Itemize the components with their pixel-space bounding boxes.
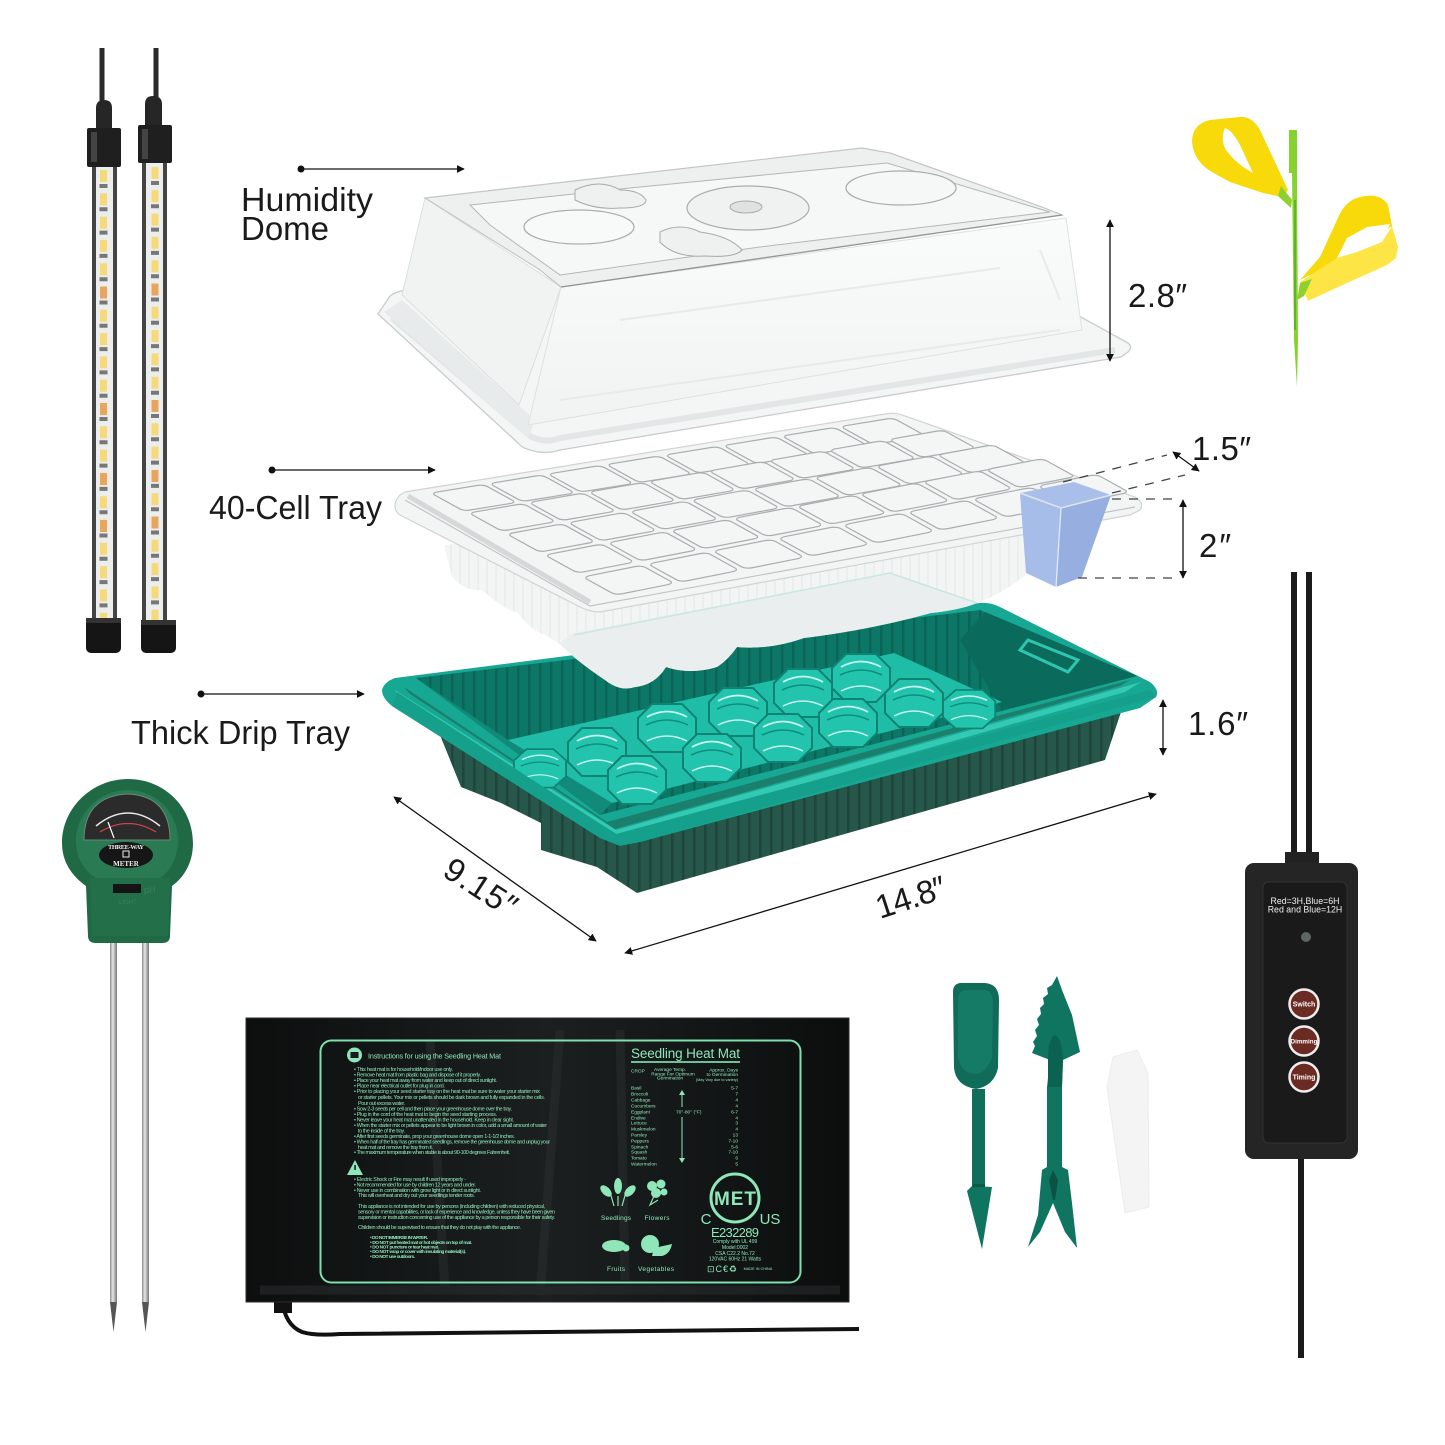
label: Humidity Dome: Humidity bbox=[241, 181, 374, 218]
warning list: • Electric Shock or Fire may result if used improperly - bbox=[354, 1177, 466, 1183]
yellow clip plant label bbox=[1192, 117, 1398, 387]
controller text: Red and Blue=12H bbox=[1268, 904, 1342, 914]
drip tray rim bbox=[382, 603, 1157, 843]
instruction list: Pour out excess water. bbox=[358, 1101, 405, 1107]
humidity dome bbox=[378, 148, 1130, 452]
crop table: 4 bbox=[735, 1098, 738, 1104]
crop table: Tomato bbox=[631, 1156, 647, 1162]
label: Humidity Dome: Dome bbox=[241, 210, 329, 247]
crop table: 5-6 bbox=[731, 1144, 738, 1150]
controller text bbox=[1268, 896, 1342, 914]
heat mat bbox=[246, 1018, 859, 1335]
dome flange bbox=[378, 290, 1130, 452]
dimension: cell width 1.5 inches: 1.5″ bbox=[1192, 430, 1251, 467]
MET certification: MET bbox=[714, 1189, 756, 1210]
icon: vegetables: Vegetables bbox=[638, 1266, 675, 1273]
icon: vegetables bbox=[638, 1235, 675, 1273]
icon: fruits: Fruits bbox=[607, 1266, 626, 1273]
left yellow loop bbox=[1192, 117, 1288, 197]
crop table: Squash bbox=[631, 1150, 648, 1156]
crop table: to Germination bbox=[707, 1072, 738, 1078]
warning list: Children should be supervised to ensure that they do not play with the appliance. bbox=[358, 1225, 521, 1231]
garden tools bbox=[953, 976, 1149, 1249]
controller body bbox=[1245, 863, 1358, 1159]
right yellow loop bbox=[1297, 196, 1398, 301]
button: timing bbox=[1290, 1062, 1318, 1092]
label: Thick Drip Tray bbox=[131, 690, 364, 751]
soil meter: LIGHT bbox=[119, 900, 137, 906]
button: dimming: Dimming bbox=[1291, 1038, 1318, 1046]
label: 40-Cell Tray bbox=[209, 466, 435, 526]
button: switch bbox=[1290, 990, 1318, 1018]
warning list: • DO NOT puncture or tear heat mat. bbox=[370, 1244, 439, 1250]
tray cells grid bbox=[431, 418, 1129, 595]
meter name plate: THREE-WAY bbox=[108, 844, 144, 851]
crop table: Average Temp. bbox=[654, 1067, 686, 1073]
trowel and fork tool bbox=[1028, 976, 1080, 1248]
warning list bbox=[354, 1177, 555, 1260]
crop table: Spinach bbox=[631, 1144, 649, 1150]
meter switch bbox=[113, 884, 141, 893]
dimension: cell width 1.5 inches bbox=[1063, 430, 1251, 493]
tray cell bottoms bbox=[444, 520, 1026, 688]
MET certification: E232289 bbox=[711, 1225, 759, 1240]
crop table: 5-7 bbox=[731, 1086, 738, 1092]
label: Humidity Dome bbox=[241, 166, 464, 247]
crop table: Range For Optimum bbox=[651, 1072, 695, 1078]
icon: flowers bbox=[644, 1180, 670, 1222]
tray flange bbox=[395, 413, 1142, 612]
crop table: 4 bbox=[735, 1116, 738, 1122]
MET certification: Model:0002 bbox=[722, 1245, 748, 1251]
right LED bar bbox=[138, 48, 176, 653]
dimension: dome height 2.8 inches: 2.8″ bbox=[1128, 277, 1187, 314]
warning list: supervision or instruction concerning use of the appliance by a person responsible for their safety. bbox=[358, 1215, 555, 1221]
crop table: Germination bbox=[657, 1076, 683, 1082]
dimension: tray height 1.6 inches: 1.6″ bbox=[1188, 705, 1248, 742]
dome front face bbox=[528, 218, 1082, 425]
meter body bbox=[62, 779, 193, 943]
warning list: • Never use in combination with grow light or in direct sunlight. bbox=[354, 1188, 481, 1194]
crop table: 7 bbox=[735, 1092, 738, 1098]
dimension: cell height 2 inches: 2″ bbox=[1199, 527, 1231, 564]
crop table: 7-10 bbox=[728, 1150, 738, 1156]
instruction list: • When half of the tray has germinated seedlings, remove the greenhouse dome and unplug your bbox=[354, 1140, 550, 1146]
highlighted blue cell bbox=[1020, 482, 1111, 587]
crop table bbox=[631, 1067, 739, 1168]
indicator light bbox=[1301, 932, 1311, 942]
dome vent circles bbox=[524, 210, 634, 244]
crop table: Basil bbox=[631, 1086, 641, 1092]
MET certification bbox=[701, 1174, 780, 1274]
left LED bar bbox=[86, 48, 121, 653]
dimension: tray width 9.15 inches bbox=[394, 797, 596, 941]
button: switch: Switch bbox=[1293, 1002, 1315, 1008]
label: Thick Drip Tray: Thick Drip Tray bbox=[131, 714, 350, 751]
warning list: • Not recommended for use by children 12 years and under. bbox=[354, 1182, 476, 1188]
drip tray outer body bbox=[440, 700, 1125, 893]
MET certification: ⊡C€♻ bbox=[707, 1264, 737, 1274]
dimension: tray height 1.6 inches bbox=[1163, 700, 1248, 755]
MET certification: US bbox=[760, 1211, 780, 1228]
MET certification: CSA C22.2 No.72 bbox=[715, 1251, 755, 1257]
crop table: 70°-80° (°F) bbox=[676, 1110, 702, 1116]
crop table: 5 bbox=[735, 1162, 738, 1168]
instruction list: • When the starter mix or pellets appear to be light brown in color, add a small amount of water bbox=[354, 1123, 547, 1129]
heat mat title: Seedling Heat Mat bbox=[631, 1046, 740, 1061]
icon: warning triangle bbox=[347, 1160, 363, 1175]
white plant marker bbox=[1107, 1050, 1149, 1213]
crop table: 3 bbox=[735, 1120, 738, 1126]
drip tray interior wall bbox=[416, 610, 1137, 815]
crop table: Lettuce bbox=[631, 1120, 647, 1126]
button: dimming bbox=[1290, 1026, 1318, 1056]
MET certification: Comply with UL 499 bbox=[713, 1239, 757, 1245]
warning list: • DO NOT put heated mat or hot objects on top of mat. bbox=[370, 1240, 472, 1246]
dome top surface bbox=[425, 148, 1062, 287]
warning list: This appliance is not intended for use by persons (including children) with reduced physical, bbox=[358, 1204, 546, 1210]
icon: seedlings bbox=[598, 1178, 638, 1222]
label: 40-Cell Tray: 40-Cell Tray bbox=[209, 489, 382, 526]
icon: flowers: Flowers bbox=[644, 1215, 670, 1222]
dimension: tray length 14.8 inches bbox=[625, 794, 1156, 953]
meter dial bbox=[84, 794, 170, 840]
instruction list: to the inside of the tray. bbox=[358, 1128, 405, 1134]
warning list: sensory or mental capabilities, or lack of experience and knowledge, unless they have been given bbox=[358, 1210, 555, 1216]
crop table: Cabbage bbox=[631, 1098, 651, 1104]
instruction list: • Never leave your heat mat unattended in the household. Keep in clear sight. bbox=[354, 1118, 514, 1124]
crop table: Cucumbers bbox=[631, 1104, 656, 1110]
instruction list: • Place your heat mat away from water and keep out of direct sunlight. bbox=[354, 1078, 497, 1084]
meter name plate bbox=[99, 842, 153, 868]
soil meter bbox=[62, 779, 193, 1332]
crop table: Watermelon bbox=[631, 1162, 657, 1168]
MET certification: C bbox=[701, 1211, 712, 1228]
crop table: Muskmelon bbox=[631, 1126, 656, 1132]
instruction list: or starter pellets. Your mix or pellets should be dark brown and fully expanded in the cells. bbox=[358, 1095, 545, 1101]
scoop tool bbox=[953, 983, 999, 1249]
crop table: 7-10 bbox=[728, 1138, 738, 1144]
crop table: Approx. Days bbox=[709, 1068, 739, 1074]
mat cable bbox=[282, 1300, 859, 1335]
meter probes bbox=[110, 940, 117, 1302]
soil meter: pH bbox=[144, 885, 156, 895]
MET certification: MADE IN CHINA bbox=[744, 1267, 773, 1271]
instructions heading bbox=[347, 1048, 501, 1062]
dome left side bbox=[402, 198, 561, 405]
crop table: CROP bbox=[631, 1068, 645, 1074]
crop table: 13 bbox=[733, 1132, 738, 1138]
instruction list: • Place near electrical outlet for plug in cord. bbox=[354, 1084, 445, 1090]
instruction list: • After first seeds germinate, prop your greenhouse dome open 1-1-1/2 inches. bbox=[354, 1134, 515, 1140]
drip tray bbox=[382, 603, 1157, 893]
drip tray floor with cell pattern bbox=[508, 653, 1002, 804]
warning list: • DO NOT use outdoors. bbox=[370, 1254, 415, 1260]
dome vent cross shapes bbox=[575, 184, 646, 208]
crop table: 4 bbox=[735, 1104, 738, 1110]
dimension: tray length 14.8 inches: 14.8″ bbox=[871, 868, 951, 926]
crop table: (May Vary due to variety) bbox=[696, 1078, 739, 1082]
crop table: Eggplant bbox=[631, 1110, 651, 1116]
MET certification: 120VAC 60Hz 21 Watts bbox=[709, 1256, 762, 1262]
LED grow light bars bbox=[86, 48, 176, 653]
instruction list: • Plug in the cord of the heat mat to begin the seed starting process. bbox=[354, 1112, 497, 1118]
crop table: 4 bbox=[735, 1126, 738, 1132]
instruction list: • Prior to placing your seed starter tray on the heat mat be sure to water your starter mix bbox=[354, 1089, 540, 1095]
40-cell tray bbox=[395, 413, 1142, 688]
button: timing: Timing bbox=[1293, 1074, 1315, 1082]
mat green border bbox=[320, 1040, 800, 1282]
instructions heading: Instructions for using the Seedling Heat Mat bbox=[368, 1052, 501, 1060]
crop table: Parsley bbox=[631, 1132, 648, 1138]
crop table: 6-7 bbox=[731, 1110, 738, 1116]
icon: fruits bbox=[602, 1240, 630, 1273]
instruction list: • This heat mat is for household/indoor use only. bbox=[354, 1067, 453, 1073]
dimension: tray width 9.15 inches: 9.15″ bbox=[437, 850, 525, 925]
stem bbox=[1289, 130, 1298, 387]
crop table: Peppers bbox=[631, 1138, 649, 1144]
instruction list: • Sow 2-3 seeds per cell and then place your greenhouse dome over the tray. bbox=[354, 1106, 512, 1112]
mat panel bbox=[246, 1018, 849, 1302]
controller text: Red=3H,Blue=6H bbox=[1271, 896, 1339, 906]
warning list: • DO NOT IMMERSE IN WATER. bbox=[370, 1235, 428, 1241]
crop table: Broccoli bbox=[631, 1092, 648, 1098]
crop table: 6 bbox=[735, 1156, 738, 1162]
warning list: This will overheat and dry out your seedlings tender roots. bbox=[358, 1193, 475, 1199]
timer controller bbox=[1245, 572, 1358, 1358]
instruction list: heat mat and remove the tray from it. bbox=[358, 1145, 433, 1151]
instruction list: • Remove heat mat from plastic bag and dispose of it properly. bbox=[354, 1072, 481, 1078]
instruction list: • The maximum temperature when stable is about 90-100 degrees Fahrenheit. bbox=[354, 1150, 510, 1156]
meter name plate: METER bbox=[113, 860, 140, 868]
warning list: • DO NOT wrap or cover with insulating material(s). bbox=[370, 1249, 466, 1255]
crop table: Endive bbox=[631, 1116, 646, 1122]
controller cables bbox=[1291, 572, 1297, 857]
instruction list bbox=[354, 1067, 550, 1156]
icon: seedlings: Seedlings bbox=[601, 1215, 632, 1222]
